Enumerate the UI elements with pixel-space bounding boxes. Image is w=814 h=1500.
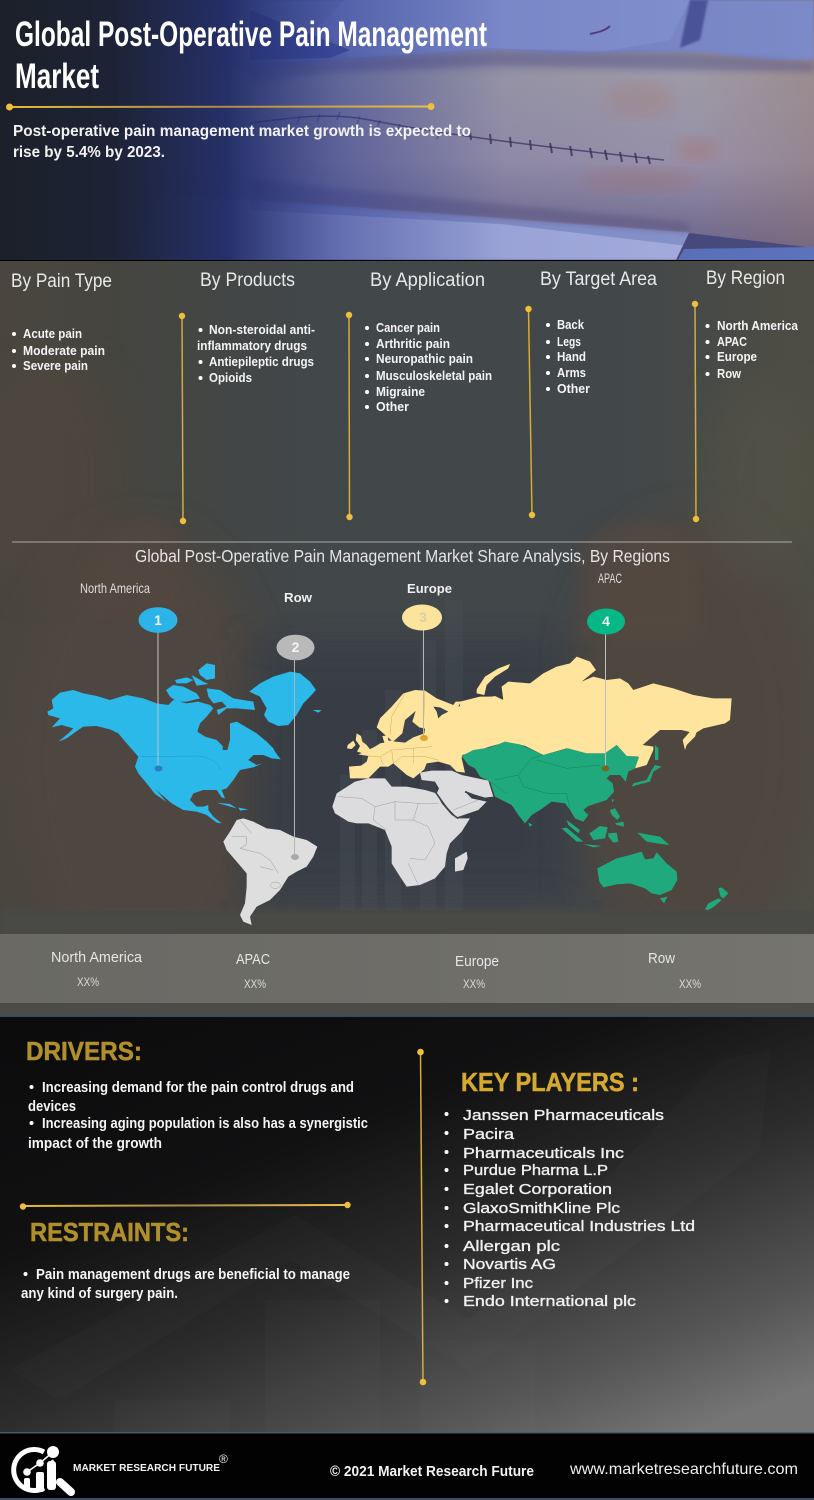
panel: by target area: Arms	[557, 366, 586, 380]
panel: by target area	[540, 269, 657, 396]
panel: by application: Other	[376, 400, 409, 414]
panel: segmentation and map background	[0, 261, 814, 934]
panel: regional share strip: XX%	[463, 979, 485, 991]
map pin 1: North America: 1	[154, 612, 162, 628]
map pin 4: APAC	[587, 608, 625, 772]
panel: by pain type: By Pain Type	[11, 271, 112, 292]
key players block: Pharmaceuticals Inc	[463, 1145, 625, 1162]
panel: by region	[706, 268, 799, 381]
map pin 3: Europe	[402, 604, 442, 741]
panel: by pain type: Severe pain	[23, 359, 88, 373]
copyright: © 2021 Market Research Future	[330, 1464, 534, 1480]
key players block: KEY PLAYERS :	[461, 1067, 639, 1097]
panel: by application: Arthritic pain	[376, 337, 450, 351]
map labels: APAC	[598, 570, 622, 586]
map pin 2: Row	[276, 635, 314, 860]
panel: regional share strip: XX%	[679, 979, 701, 991]
panel: by products	[197, 270, 315, 385]
panel: hero header	[0, 0, 814, 260]
panel: by products: inflammatory drugs	[197, 339, 307, 353]
gold vertical divider	[417, 1049, 426, 1385]
map labels: Europe	[407, 581, 452, 596]
map: Russia	[460, 657, 732, 768]
restraints block: RESTRAINTS:	[30, 1217, 189, 1247]
panel: regional share strip: Europe	[455, 953, 499, 970]
panel: by products: By Products	[200, 270, 295, 291]
panel: regional share strip: XX%	[77, 977, 99, 989]
drivers block: Increasing aging population is also has a synergistic	[42, 1116, 368, 1132]
divider line 3	[525, 306, 535, 518]
divider line 1	[179, 313, 186, 524]
panel: by pain type	[11, 271, 112, 373]
panel: by region: APAC	[717, 335, 747, 349]
hero photo: surgical incision	[0, 0, 814, 260]
title	[15, 15, 487, 96]
gold divider	[20, 1202, 351, 1210]
map labels: North America	[80, 580, 150, 596]
drivers block: DRIVERS:	[26, 1036, 142, 1066]
subtitle: rise by 5.4% by 2023.	[13, 144, 165, 161]
website url: www.marketresearchfuture.com	[569, 1461, 798, 1478]
panel: by application	[365, 270, 492, 414]
panel: by application: Cancer pain	[376, 321, 440, 335]
map: South America	[223, 818, 317, 925]
panel: regional share strip: XX%	[244, 979, 266, 991]
restraints block: any kind of surgery pain.	[21, 1286, 178, 1302]
subtitle	[13, 123, 471, 161]
key players block: Purdue Pharma L.P	[463, 1162, 608, 1179]
title: Market	[15, 57, 99, 96]
map section heading: Global Post-Operative Pain Management Market Share Analysis, By Regions	[135, 546, 670, 566]
panel: by target area: By Target Area	[540, 269, 657, 290]
panel: regional share strip: APAC	[236, 951, 270, 968]
panel: by region: By Region	[706, 268, 785, 289]
world map	[47, 570, 732, 925]
key players block: Novartis AG	[463, 1256, 556, 1273]
panel: by application: Migraine	[376, 385, 425, 399]
panel: by target area: Legs	[557, 335, 581, 349]
panel: by products: Antiepileptic drugs	[209, 355, 314, 369]
map: Asia-Pacific	[462, 742, 728, 910]
divider line 4	[692, 301, 699, 522]
panel: regional share strip	[0, 934, 814, 1015]
key players block: GlaxoSmithKline Plc	[463, 1200, 621, 1217]
panel: regional share strip: Row	[648, 950, 675, 967]
panel: footer	[0, 1432, 814, 1500]
map: North America and Greenland	[47, 663, 322, 823]
panel: by region: Row	[717, 367, 741, 381]
map: Africa and Middle East	[332, 771, 493, 887]
panel: by target area: Hand	[557, 350, 586, 364]
title: Global Post-Operative Pain Management	[15, 15, 487, 54]
panel: by products: Opioids	[209, 371, 252, 385]
map labels	[80, 570, 622, 605]
panel: by pain type: Acute pain	[23, 327, 82, 341]
map labels: Row	[284, 590, 313, 605]
panel: regional share strip: North America	[51, 949, 143, 966]
key players block: Pacira	[463, 1126, 515, 1143]
map: Europe	[347, 664, 530, 778]
panel: by region: North America	[717, 319, 799, 333]
key players block: Janssen Pharmaceuticals	[463, 1107, 664, 1124]
map pin 1: North America	[138, 607, 178, 772]
map pin 2: Row: 2	[292, 639, 300, 655]
panel: drivers, restraints and key players background	[0, 1017, 814, 1440]
divider line 2	[346, 312, 353, 520]
key players block	[444, 1067, 695, 1310]
drivers block: Increasing demand for the pain control drugs and	[42, 1080, 354, 1096]
panel: by application: Musculoskeletal pain	[376, 369, 492, 383]
key players block: Egalet Corporation	[463, 1181, 612, 1198]
drivers block	[26, 1036, 368, 1152]
key players block: Pharmaceutical Industries Ltd	[463, 1218, 695, 1235]
logo wordmark: ®	[219, 1452, 228, 1466]
panel: by products: Non-steroidal anti-	[209, 323, 315, 337]
gold divider	[6, 103, 434, 110]
panel: by target area: Other	[557, 382, 590, 396]
subtitle: Post-operative pain management market growth is expected to	[13, 123, 471, 140]
key players block: Pfizer Inc	[463, 1275, 534, 1292]
restraints block: Pain management drugs are beneficial to manage	[36, 1267, 350, 1283]
key players block: Allergan plc	[463, 1238, 561, 1255]
drivers block: impact of the growth	[28, 1136, 162, 1152]
panel: by target area: Back	[557, 318, 584, 332]
panel: by application: Neuropathic pain	[376, 352, 473, 366]
map pin 3: Europe: 3	[419, 609, 427, 625]
map pin 4: APAC: 4	[602, 613, 610, 629]
logo wordmark	[73, 1452, 228, 1474]
logo wordmark: MARKET RESEARCH FUTURE	[73, 1463, 220, 1474]
key players block: Endo International plc	[463, 1293, 637, 1310]
panel: by pain type: Moderate pain	[23, 344, 105, 358]
panel: by region: Europe	[717, 350, 757, 364]
panel: by application: By Application	[370, 270, 485, 291]
restraints block	[21, 1217, 350, 1302]
drivers block: devices	[28, 1099, 76, 1115]
icon: market research future logo	[14, 1446, 71, 1492]
